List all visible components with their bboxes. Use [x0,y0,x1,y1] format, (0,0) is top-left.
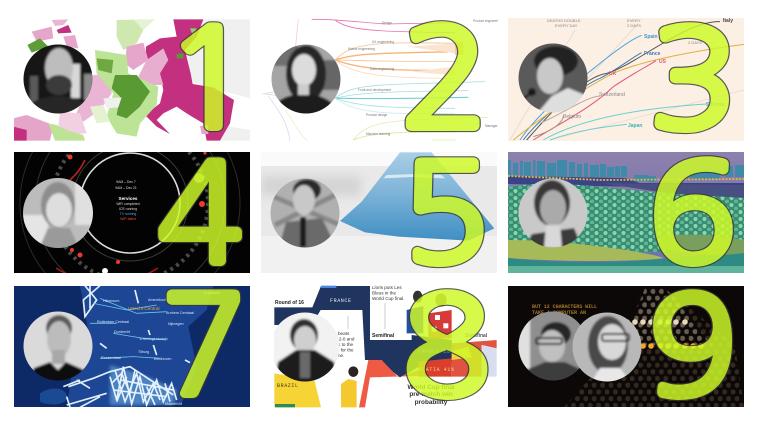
city labels: Arnhem Centraal [166,311,194,315]
chart text: beats [338,331,350,336]
chart text: World Cup final. [372,296,405,301]
number 8: 8 [402,280,491,415]
number 7: 7 [160,279,248,414]
stage labels: Semifinal [372,333,395,339]
country labels: UK [609,71,617,77]
chart text: Bleus in the [372,290,396,296]
panel 7: night map of train lines [14,286,250,407]
city labels: Tilburg [138,350,149,354]
city labels: Maastricht [165,402,182,406]
panel headline: TAKE A COMPUTER AN [532,310,586,316]
chart annotations: EVERY [627,18,641,23]
radial chart legend: 9AM – Dec 21 [115,186,137,190]
portrait 2 [272,44,340,114]
chart text: Lloris puts Les [372,285,402,290]
number 6: 6 [648,147,737,282]
country labels: France [644,51,661,57]
branch labels: Design [382,21,392,25]
country labels [563,18,733,129]
city labels: Rotterdam Centraal [97,320,129,324]
city labels: Amersfoort [148,298,166,302]
branch labels: UX engineering [372,40,394,44]
country labels: Switzerland [599,92,625,98]
chart annotations: DEATHS DOUBLE [547,18,581,23]
country labels: Spain [644,34,658,40]
radial chart legend: ICE running [119,207,137,211]
number 5: 5 [401,147,491,282]
chart annotations [547,18,702,45]
portrait 9a [518,312,580,380]
country labels: US [659,59,667,65]
branch labels: Manager [485,124,499,128]
number 8: 8 [402,280,491,415]
city labels: Roosendaal [101,356,121,360]
team labels: CROATIA 41% [415,367,455,373]
country labels: S.Korea [706,102,725,108]
number 6: 6 [648,147,737,282]
radial chart legend: WiFi completed [116,202,140,206]
branch labels: Product engineering [473,19,502,23]
city labels: Enschede [204,291,220,295]
panel 8: World Cup probability stream chart [267,285,497,407]
team labels [277,298,455,389]
portrait 8 [274,312,340,382]
portrait 9b [572,312,642,382]
city labels: Eindhoven [154,357,171,361]
panel headline: BUT 12 CHARACTERS WILL [532,304,597,310]
number 1: 1 [164,11,254,147]
number 9: 9 [648,280,737,415]
portrait 3 [518,44,588,112]
country labels: Japan [628,123,642,129]
team labels: BRAZIL [277,383,299,389]
number 4: 4 [157,145,243,282]
chart subtitle: probability [415,399,448,406]
branch labels: Machine learning [366,132,391,136]
radial chart legend: Services [119,196,138,201]
city skyline [508,160,744,182]
number 5: 5 [401,147,491,282]
chart annotations: EVERY DAY [555,23,578,28]
branch labels: Front-end development [358,88,391,92]
panel 4: black radial chart [14,152,250,273]
chart text: ls for the [336,348,354,352]
radial chart legend: WiFi failed [120,217,136,221]
panel 9: dot-matrix password chart [508,286,744,407]
radial chart legend [115,180,140,221]
team labels: FRANCE 59% [418,349,454,355]
number 1: 1 [164,11,254,147]
chart annotations: 2 DAYS [627,23,641,28]
country labels: Italy [723,18,733,24]
stage labels: Semifinal [465,333,488,339]
branch labels: Data engineering [370,67,395,71]
country labels: Belgium [563,114,581,120]
chart annotations: 2 DAYS [688,40,702,45]
number 3: 3 [649,13,738,148]
chart text: – 2-0 and [335,336,355,342]
portrait 6 [518,178,588,248]
orange dot row [632,343,704,349]
branch labels [348,19,502,136]
city labels: Nijmegen [168,322,184,326]
portrait 7 [24,312,92,380]
branch labels: Product design [366,113,387,117]
chart subtitle [407,384,455,406]
portrait 5 [270,178,340,248]
stage labels [275,300,488,339]
city labels: 's Hertogenbosch [139,337,168,341]
panel 3: coronavirus trajectory line chart [508,18,744,141]
chart subtitle: World Cup final [407,384,455,391]
branch labels: Mobile engineering [348,47,375,51]
chart text [335,285,405,358]
number 2: 2 [400,12,490,147]
panel headline [532,304,597,314]
portrait 4 [23,178,93,248]
chart text: s to the [338,342,354,347]
number 7: 7 [160,279,248,414]
city labels: Hilversum [103,299,119,303]
panel 5: terrain with blue mountain [261,152,497,273]
radial chart legend: 9AM – Dec 7 [116,180,136,184]
number 2: 2 [400,12,490,147]
number 9: 9 [648,280,737,415]
portrait 1 [24,44,92,114]
team labels: FRANCE [330,298,352,304]
city labels: Utrecht Central [128,306,160,311]
chart subtitle: pre-match win [409,391,453,398]
stage labels: Round of 16 [275,300,304,306]
panel 6: illustrated city and forest [508,152,744,273]
chart text: ne. [338,353,344,358]
panel 2: branching tree of career paths [262,19,502,142]
panel 1: Europe choropleth map [13,19,250,141]
number 3: 3 [649,13,738,148]
city labels: Dordrecht [114,330,130,334]
number 4: 4 [157,145,243,282]
radial chart legend: TV running [120,212,136,216]
city labels [97,291,220,406]
